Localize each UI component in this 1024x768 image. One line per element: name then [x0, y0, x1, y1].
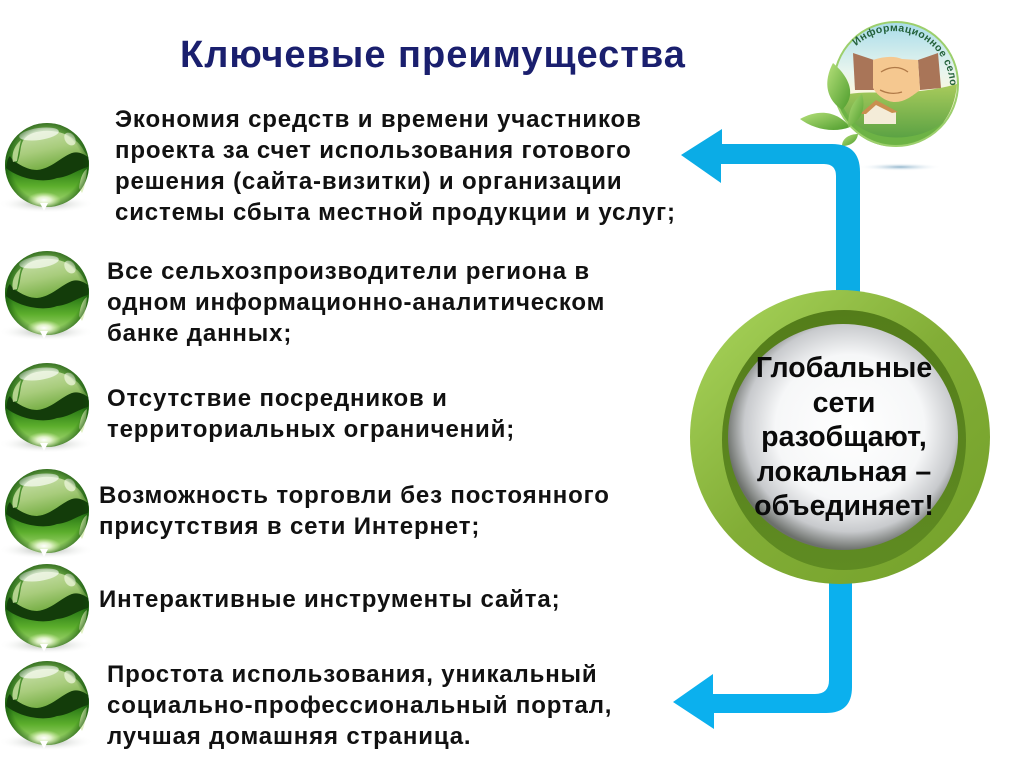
arrow: bottom cyan arrow — [673, 578, 852, 729]
text block 2: одном информационно-аналитическом — [107, 289, 605, 316]
text block 4: Возможность торговли без постоянного — [99, 482, 610, 509]
text block 1: решения (сайта-визитки) и организации — [115, 168, 622, 195]
sphere 5 — [0, 564, 94, 654]
text block 6 — [107, 661, 612, 750]
sphere 3 — [0, 363, 94, 453]
text block 1 — [115, 106, 676, 226]
text block 2: банке данных; — [107, 320, 292, 347]
text block 1: проекта за счет использования готового — [115, 137, 632, 164]
slogan in ring: разобщают, — [761, 421, 927, 453]
text block 3: Отсутствие посредников и — [107, 385, 448, 412]
text block 1: Экономия средств и времени участников — [115, 106, 642, 133]
slogan in ring — [754, 352, 934, 522]
sphere 2 — [0, 251, 94, 341]
sphere 6 — [0, 661, 94, 751]
sphere 4 — [0, 469, 94, 559]
text block 1: системы сбыта местной продукции и услуг; — [115, 199, 676, 226]
text block 3: территориальных ограничений; — [107, 416, 515, 443]
slogan in ring: объединяет! — [754, 490, 934, 522]
text block 2 — [107, 258, 605, 347]
title: Ключевые преимущества — [180, 34, 686, 76]
text block 4 — [99, 482, 610, 540]
text block 6: лучшая домашняя страница. — [107, 723, 471, 750]
logo text: Информационное село — [852, 26, 956, 86]
text block 6: социально-профессиональный портал, — [107, 692, 612, 719]
logo: Информационное село — [800, 21, 959, 170]
text block 5: Интерактивные инструменты сайта; — [99, 586, 560, 613]
text block 3 — [107, 385, 515, 443]
slogan in ring: сети — [813, 386, 875, 418]
text block 6: Простота использования, уникальный — [107, 661, 598, 688]
slogan in ring: Глобальные — [756, 352, 932, 384]
text block 4: присутствия в сети Интернет; — [99, 513, 480, 540]
sphere 1 — [0, 123, 94, 213]
central ring — [690, 290, 990, 584]
text block 2: Все сельхозпроизводители региона в — [107, 258, 590, 285]
slogan in ring: локальная – — [757, 456, 931, 488]
arrow: top cyan arrow — [681, 129, 860, 292]
icon: house — [860, 100, 898, 124]
icon: handshake — [853, 53, 941, 102]
icon: leaves — [800, 63, 863, 146]
